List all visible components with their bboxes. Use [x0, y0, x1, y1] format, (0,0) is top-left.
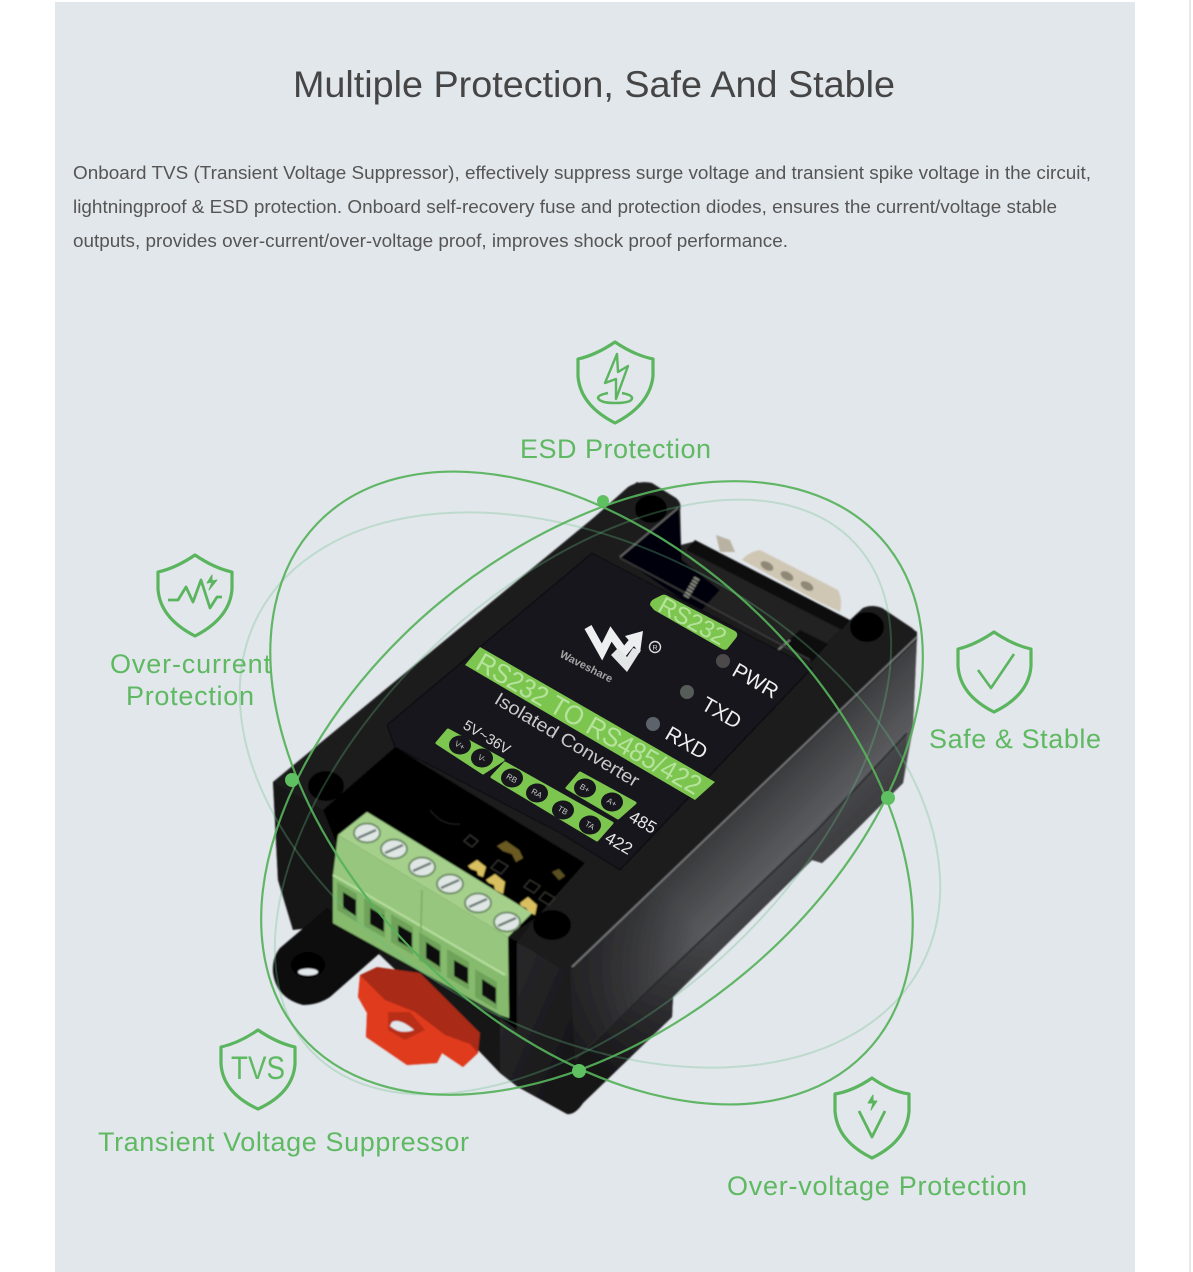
device: green terminal block — [333, 812, 532, 1018]
device: Waveshare logo — [558, 627, 660, 685]
device: silhouette — [273, 482, 917, 1114]
device: side seam — [575, 733, 907, 1060]
icon: ESD shield — [578, 342, 653, 423]
device: RS232 tag: RS232 — [654, 592, 731, 651]
title: Multiple Protection, Safe And Stable — [293, 64, 895, 105]
device: jumpers — [468, 841, 565, 915]
icon: over-current shield — [158, 555, 232, 636]
orbit rings — [145, 350, 1039, 1226]
device: top edge highlight — [572, 637, 917, 967]
label: Over-current Protection: Over-current — [110, 649, 271, 679]
device: pin labels: RA — [530, 787, 544, 800]
device: pin labels: A+ — [605, 796, 619, 809]
device: label panel — [387, 553, 812, 870]
device: LEDs and labels — [646, 654, 782, 764]
device: LEDs and labels: TXD — [697, 693, 745, 734]
label: Safe & Stable: Safe & Stable — [929, 724, 1101, 754]
device: pin labels: RB — [505, 772, 519, 785]
text block: description: Onboard TVS (Transient Voltage Suppressor), effectively suppress surge voltage and transient spike voltage in the circuit, — [73, 162, 1091, 183]
device: left wall — [273, 782, 333, 930]
device: LEDs and labels: PWR — [728, 659, 782, 704]
device: pin labels: 422 — [602, 828, 636, 859]
device: pin labels: TB — [556, 804, 569, 817]
device: right wall — [567, 637, 917, 1114]
label: Over-voltage Protection: Over-voltage Protection — [727, 1171, 1027, 1201]
icon text: TVS: TVS — [231, 1050, 285, 1086]
device: top face — [273, 482, 917, 970]
label: ESD Protection: ESD Protection — [520, 434, 711, 464]
text block: description: lightningproof & ESD protection. Onboard self-recovery fuse and protection diodes, ensures the current/voltage stable — [73, 196, 1057, 217]
device: LEDs and labels: RXD — [661, 722, 711, 764]
device: main green label: Isolated Converter — [491, 688, 643, 791]
device: connector metal — [716, 535, 841, 612]
text block: description: outputs, provides over-current/over-voltage proof, improves shock proof performance. — [73, 230, 788, 251]
terminal wire holes — [337, 882, 497, 1010]
device: pin labels — [437, 730, 660, 859]
device: mounting ear — [273, 908, 380, 1005]
orbit nodes — [285, 495, 895, 1078]
terminal screws — [354, 824, 520, 932]
device: pin labels: 485 — [626, 807, 660, 838]
faint orbit rings — [145, 388, 1035, 1206]
icon: safe and stable shield — [958, 632, 1031, 712]
device: main green label: 5V~36V — [460, 718, 513, 758]
icon: over-voltage shield — [835, 1078, 909, 1158]
device: front wall — [500, 943, 575, 1114]
device: connector recess — [620, 508, 850, 662]
icon: TVS shield — [221, 1030, 295, 1109]
text block: description — [73, 162, 1091, 251]
device: pin labels: TA — [583, 819, 597, 832]
label: Transient Voltage Suppressor: Transient Voltage Suppressor — [98, 1127, 469, 1157]
device: right terminal gap — [500, 937, 517, 1030]
device: isolated converter — [273, 482, 917, 1114]
device: red DIN clip — [358, 967, 480, 1067]
device: Waveshare logo: Waveshare — [558, 649, 614, 685]
device: Waveshare logo: R — [652, 645, 658, 652]
device: pin labels: V- — [476, 753, 488, 764]
label: Over-current Protection — [110, 649, 271, 711]
device: pin labels: V+ — [453, 739, 467, 752]
device labels — [437, 592, 782, 859]
device: main green label: RS232 TO RS485/422 — [471, 647, 707, 801]
device: PCB details — [430, 810, 555, 905]
device: mounting holes — [308, 495, 884, 940]
device: pin labels: B+ — [578, 782, 592, 795]
label: Over-current Protection: Protection — [126, 681, 254, 711]
device: terminal recess — [323, 747, 585, 937]
device: connector screw — [686, 578, 697, 597]
